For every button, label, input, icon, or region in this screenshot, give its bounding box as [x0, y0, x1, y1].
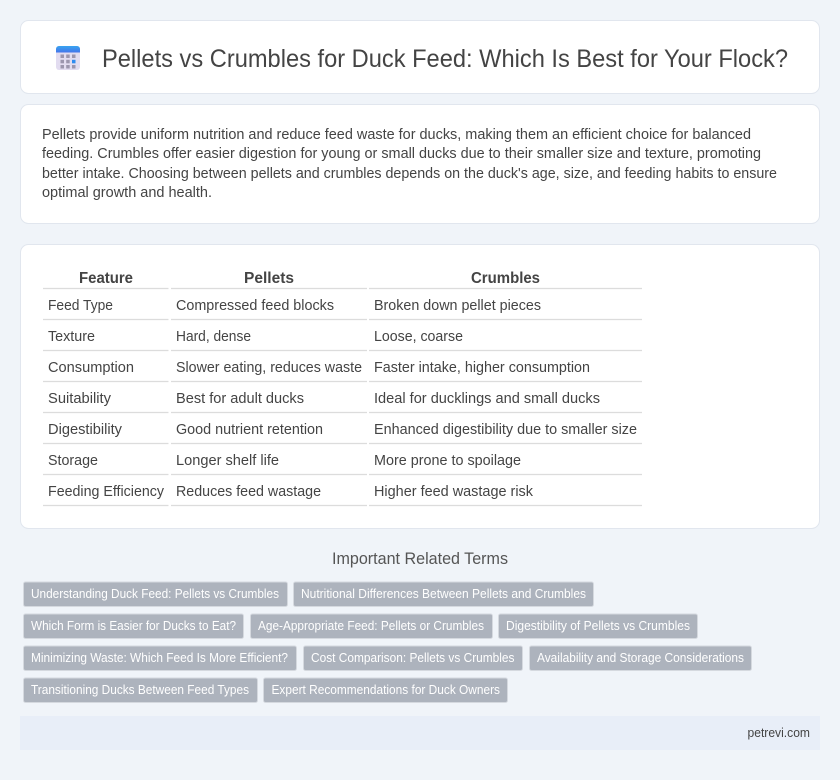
table header: Pellets — [244, 270, 294, 287]
row: suitability: Ideal for ducklings and small ducks — [374, 391, 600, 407]
row: digestibility: Digestibility — [48, 422, 123, 438]
row: storage: Storage — [48, 453, 98, 469]
tag: Nutritional Differences Between Pellets and Crumbles — [301, 587, 586, 601]
tag — [294, 582, 594, 606]
tag — [530, 646, 752, 670]
row: texture: Loose, coarse — [374, 329, 463, 345]
row: storage — [48, 453, 521, 469]
row: digestibility — [48, 422, 637, 438]
tag: Expert Recommendations for Duck Owners — [272, 683, 500, 697]
tag — [24, 582, 288, 606]
tag: Cost Comparison: Pellets vs Crumbles — [311, 651, 514, 665]
tag — [498, 614, 698, 638]
row: digestibility: Good nutrient retention — [176, 422, 323, 438]
panel: intro paragraph: Pellets provide uniform nutrition and reduce feed waste for ducks, making them an efficient choice for balanced — [42, 127, 751, 143]
footer: petrevi.com — [748, 726, 810, 740]
tag — [24, 678, 258, 702]
tag — [264, 678, 508, 702]
row: feed type: Broken down pellet pieces — [374, 298, 541, 314]
row: digestibility: Enhanced digestibility due to smaller size — [374, 422, 637, 438]
tag — [250, 614, 492, 638]
panel: comparison table — [20, 244, 820, 528]
panel: intro paragraph: feeding. Crumbles offer easier digestion for young or small ducks due to their smaller size and texture, promoting — [42, 146, 761, 162]
tag — [24, 646, 296, 670]
row: feed type — [48, 298, 541, 314]
row: suitability: Best for adult ducks — [176, 391, 304, 407]
row: texture: Hard, dense — [176, 329, 251, 345]
row: consumption — [48, 360, 590, 376]
footer — [20, 716, 820, 750]
title: Pellets vs Crumbles for Duck Feed: Which Is Best for Your Flock? — [102, 45, 788, 73]
tag: Age-Appropriate Feed: Pellets or Crumbles — [258, 619, 484, 633]
row: storage: Longer shelf life — [176, 453, 279, 469]
row: texture — [48, 329, 463, 345]
tag: Understanding Duck Feed: Pellets vs Crumbles — [31, 587, 279, 601]
table header — [79, 270, 540, 287]
tag: Availability and Storage Considerations — [537, 651, 744, 665]
tag: Digestibility of Pellets vs Crumbles — [506, 619, 690, 633]
row: consumption: Faster intake, higher consumption — [374, 360, 590, 376]
tag: Transitioning Ducks Between Feed Types — [31, 683, 249, 697]
row: texture: Texture — [48, 329, 95, 345]
panel: intro paragraph — [20, 104, 820, 224]
row: storage: More prone to spoilage — [374, 453, 521, 469]
panel: header — [20, 20, 820, 94]
row: suitability: Suitability — [48, 391, 112, 407]
row: feeding efficiency: Feeding Efficiency — [48, 484, 165, 500]
table header: Feature — [79, 270, 133, 287]
related term tags — [24, 582, 752, 702]
tag: Minimizing Waste: Which Feed Is More Efficient? — [31, 651, 288, 665]
row: suitability — [48, 391, 600, 407]
row: feed type: Feed Type — [48, 298, 113, 314]
panel: intro paragraph: better intake. Choosing between pellets and crumbles depends on the duck's age, size, and feeding habits to ensure — [42, 166, 777, 182]
tag — [304, 646, 522, 670]
heading: related terms: Important Related Terms — [332, 550, 508, 568]
row: feeding efficiency — [48, 484, 534, 500]
tag: Which Form is Easier for Ducks to Eat? — [31, 619, 236, 633]
row: feeding efficiency: Higher feed wastage risk — [374, 484, 534, 500]
row: feed type: Compressed feed blocks — [176, 298, 334, 314]
row: consumption: Slower eating, reduces waste — [176, 360, 362, 376]
panel: intro paragraph: optimal growth and health. — [42, 185, 212, 201]
icon: calendar — [56, 46, 80, 70]
row: consumption: Consumption — [48, 360, 134, 376]
tag — [24, 614, 244, 638]
row: feeding efficiency: Reduces feed wastage — [176, 484, 321, 500]
table header: Crumbles — [471, 270, 540, 287]
